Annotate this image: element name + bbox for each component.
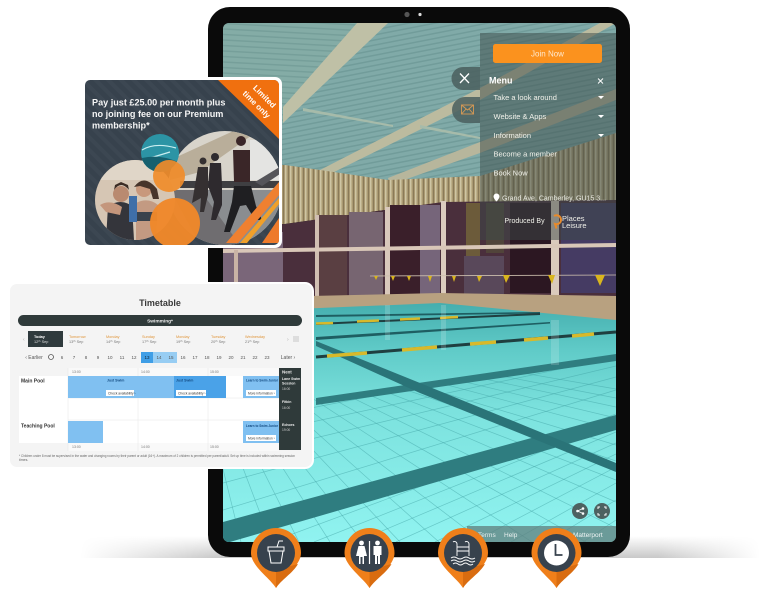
menu heading: Menu — [489, 76, 512, 86]
next panel: Echoes — [282, 423, 295, 427]
orange circles — [150, 160, 200, 248]
tour footer bar — [467, 526, 616, 542]
schedule grid: 14:00 — [141, 445, 150, 449]
dark floor strips — [223, 312, 616, 544]
produced by logo — [504, 214, 587, 230]
screen: pool photo — [185, 23, 616, 544]
session blocks: More information › — [248, 436, 275, 440]
hour selector: 10 — [107, 355, 113, 360]
hour selector: 22 — [252, 355, 258, 360]
tour footer bar: Help — [504, 532, 518, 539]
footnote: times. — [19, 458, 28, 462]
footnote: * Children under 8 must be supervised in the water and changing rooms by their parent or adult (16+). A maximum of 2 children is permitted per parent/adult. Set up time is included within swimming session — [19, 454, 295, 458]
menu items: Take a look around — [494, 93, 557, 102]
pool tile grid — [223, 366, 616, 542]
next panel — [279, 368, 301, 450]
pool labels — [21, 378, 55, 430]
date tabs: 19ᵗʰ Sep — [176, 340, 190, 344]
date tabs: › — [287, 337, 289, 343]
camera — [404, 12, 422, 17]
session blocks — [68, 376, 279, 443]
footnote — [19, 454, 295, 462]
date tabs: 20ᵗʰ Sep — [211, 340, 225, 344]
session blocks: Learn to Swim Junior — [246, 378, 279, 382]
date tabs: 21ᵗʰ Sep — [245, 340, 259, 344]
mail tab — [452, 97, 480, 123]
hour selector: 20 — [228, 355, 234, 360]
pin: drinks — [251, 528, 301, 588]
limited time ribbon — [218, 80, 279, 139]
hour selector: 7 — [73, 355, 76, 360]
hour selector: 14 — [156, 355, 162, 360]
pin: pool — [438, 528, 488, 588]
next panel: Fitkin — [282, 400, 291, 404]
produced by logo: Produced By — [504, 218, 545, 225]
menu panel — [480, 33, 616, 240]
fullscreen button — [594, 503, 610, 519]
date tabs — [23, 331, 299, 347]
pin: clock — [532, 528, 582, 588]
schedule grid: 13:00 — [72, 445, 81, 449]
friends photo circle — [95, 160, 175, 240]
schedule grid: 15:00 — [210, 445, 219, 449]
next panel: 19:00 — [282, 428, 290, 432]
hour selector: Later › — [281, 355, 296, 361]
tour footer bar: Matterport — [573, 532, 603, 539]
session blocks: Just Swim — [107, 378, 124, 382]
bunting — [370, 275, 616, 286]
limited time ribbon: Limited — [251, 83, 278, 110]
ground shadow — [102, 539, 744, 558]
schedule grid: 13:00 — [72, 370, 81, 374]
menu items — [494, 93, 557, 178]
hour selector: 6 — [61, 355, 64, 360]
headline: Pay just £25.00 per month plus — [92, 98, 225, 108]
pool labels: Teaching Pool — [21, 424, 55, 430]
dark windows — [223, 200, 616, 305]
address: Grand Ave, Camberley, GU15 3... — [502, 196, 606, 202]
ceiling — [223, 23, 616, 180]
pool labels: Main Pool — [21, 378, 45, 384]
menu items: Book Now — [494, 168, 528, 178]
column reflections — [385, 305, 559, 365]
swimming filter bar — [18, 315, 302, 326]
date tabs: Tuesday — [211, 335, 226, 339]
menu close — [598, 78, 603, 84]
next panel: 16:00 — [282, 406, 290, 410]
next panel: Session — [282, 382, 295, 386]
share button — [572, 503, 588, 519]
menu items: Information — [494, 131, 531, 140]
promo card — [83, 77, 285, 250]
timetable title: Timetable — [139, 298, 181, 308]
slatted wall — [282, 133, 616, 224]
pool water — [223, 303, 616, 542]
session blocks: Check availability › — [108, 392, 135, 396]
tablet body — [208, 7, 630, 557]
produced by logo: Leisure — [562, 221, 587, 230]
date tabs: Sunday — [142, 335, 155, 339]
date tabs: Monday — [106, 335, 120, 339]
date tabs: Today — [34, 335, 46, 339]
card frame — [8, 282, 314, 469]
schedule grid: 14:00 — [141, 370, 150, 374]
menu arrows — [598, 96, 604, 137]
hour selector: 23 — [264, 355, 270, 360]
headline: no joining fee on our Premium — [92, 109, 223, 119]
schedule grid: 15:00 — [210, 370, 219, 374]
hour selector: 15 — [168, 355, 174, 360]
hour selector: 9 — [97, 355, 100, 360]
menu items: Website & Apps — [494, 112, 547, 121]
hour selector: 19 — [216, 355, 222, 360]
limited time ribbon: time only — [241, 89, 272, 121]
session blocks: More information › — [248, 392, 275, 396]
hour selector: 8 — [85, 355, 88, 360]
next panel: Lane Swim — [282, 377, 300, 381]
diagonal stripes — [226, 182, 279, 243]
hour selector: 11 — [120, 355, 125, 360]
tablet — [185, 7, 630, 557]
date tabs: ‹ — [23, 337, 25, 343]
hour selector: 12 — [131, 355, 137, 360]
join now button — [493, 44, 602, 63]
headline — [92, 98, 225, 130]
card content — [85, 80, 285, 250]
hour selector — [25, 352, 296, 363]
join now button: Join Now — [531, 50, 564, 58]
hour selector: 21 — [240, 355, 246, 360]
session blocks: Check availability › — [178, 392, 205, 396]
headline: membership* — [92, 120, 150, 130]
date tabs: 14ᵗʰ Sep — [106, 340, 120, 344]
produced by logo: Places — [562, 214, 585, 223]
card background — [85, 80, 279, 245]
hour selector: 18 — [204, 355, 210, 360]
hour selector: 17 — [192, 355, 198, 360]
session blocks: Learn to Swim Junior — [246, 424, 279, 428]
tour footer bar: Terms — [478, 532, 496, 539]
menu items: Become a member — [494, 150, 557, 158]
next panel: 16:00 — [282, 387, 290, 391]
card frame — [83, 77, 282, 248]
date tabs: Tomorrow — [69, 335, 86, 339]
location pins — [251, 528, 582, 588]
timetable card — [8, 282, 314, 469]
pool deck — [314, 293, 616, 320]
date tabs: 17ᵗʰ Sep — [142, 340, 156, 344]
next panel: Next — [282, 370, 292, 374]
gym photo circle — [169, 131, 279, 245]
date tabs: Monday — [176, 335, 190, 339]
pin: toilets — [344, 528, 394, 588]
date tabs: 13ᵗʰ Sep — [69, 340, 83, 344]
hour selector: 16 — [180, 355, 186, 360]
hour selector: 13 — [144, 355, 150, 360]
close tab — [452, 67, 480, 90]
date tabs: 12ᵗʰ Sep — [34, 340, 48, 344]
lane ropes — [316, 314, 616, 357]
swimmer photo circle — [141, 134, 179, 172]
hour selector: ‹ Earlier — [25, 355, 43, 361]
schedule grid — [19, 368, 279, 451]
session blocks: Just Swim — [176, 378, 193, 382]
swimming filter bar: Swimming* — [147, 318, 173, 324]
date tabs: Wednesday — [245, 335, 265, 339]
